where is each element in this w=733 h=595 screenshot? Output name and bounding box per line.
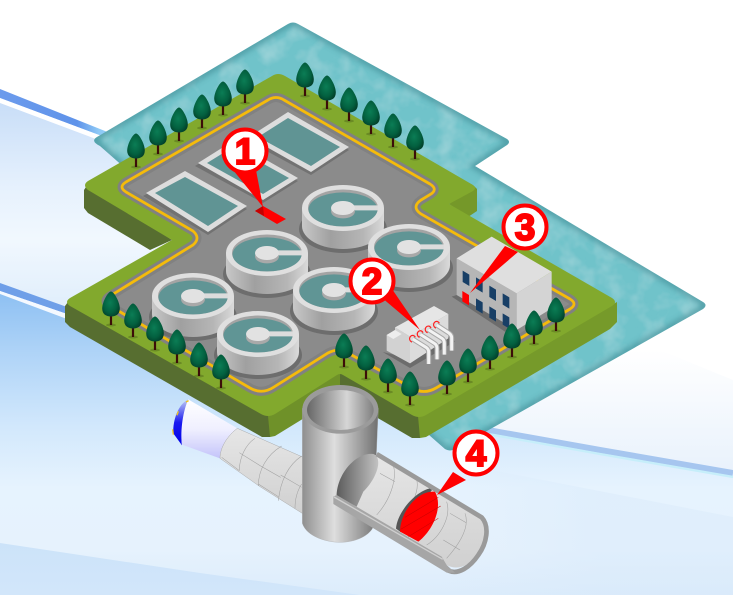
vertical shaft bbox=[302, 385, 378, 542]
yellow road line bbox=[106, 98, 574, 392]
callout 2: 2 bbox=[362, 261, 382, 302]
windows bbox=[463, 271, 509, 329]
callout 3 bbox=[470, 206, 546, 293]
tank A bbox=[143, 171, 247, 235]
red plate in pipe bbox=[396, 488, 441, 542]
cutaway pipe interior bbox=[337, 454, 485, 568]
pipe rim bbox=[377, 454, 486, 572]
trees lower right row bbox=[438, 298, 565, 396]
white pipe sleeve bbox=[181, 399, 237, 458]
tiled pipe section bbox=[220, 428, 303, 514]
pipe lower lip bbox=[333, 495, 455, 573]
back sewer pipe bbox=[173, 399, 303, 514]
red door bbox=[462, 291, 469, 305]
green plant platform bbox=[65, 74, 617, 438]
tank C bbox=[246, 112, 349, 175]
blue pipe end bbox=[173, 399, 196, 445]
callout 2 bbox=[350, 260, 420, 330]
platform top surface bbox=[67, 74, 615, 417]
trees lower middle row bbox=[335, 334, 419, 406]
callout 3: 3 bbox=[515, 207, 535, 248]
circular clarifier tanks bbox=[149, 185, 453, 379]
tank B bbox=[195, 141, 298, 203]
vertical shaft and cutaway sewer pipe bbox=[302, 385, 486, 573]
callout 4: 4 bbox=[466, 433, 487, 474]
callout 4 bbox=[437, 432, 498, 495]
yellow marks on pipe end bbox=[173, 401, 189, 435]
trees upper right row bbox=[296, 62, 424, 160]
trees upper left row bbox=[127, 70, 254, 168]
pipe tile joints bbox=[222, 438, 302, 508]
pipe opening into shaft bbox=[337, 454, 378, 507]
perimeter road bbox=[106, 98, 574, 392]
pipes bbox=[413, 325, 452, 364]
platform side walls bbox=[65, 184, 617, 438]
water around the plant bbox=[94, 22, 705, 450]
red marker on ground bbox=[255, 206, 286, 224]
callout 1 bbox=[224, 130, 266, 207]
cutaway tile joints bbox=[377, 465, 466, 558]
callout 1: 1 bbox=[235, 131, 255, 172]
red pipe valves bbox=[410, 321, 439, 342]
trees lower left row bbox=[102, 292, 230, 390]
rectangular settling tanks bbox=[143, 112, 349, 235]
pump building with pipes bbox=[383, 306, 455, 368]
office building bbox=[452, 237, 552, 332]
